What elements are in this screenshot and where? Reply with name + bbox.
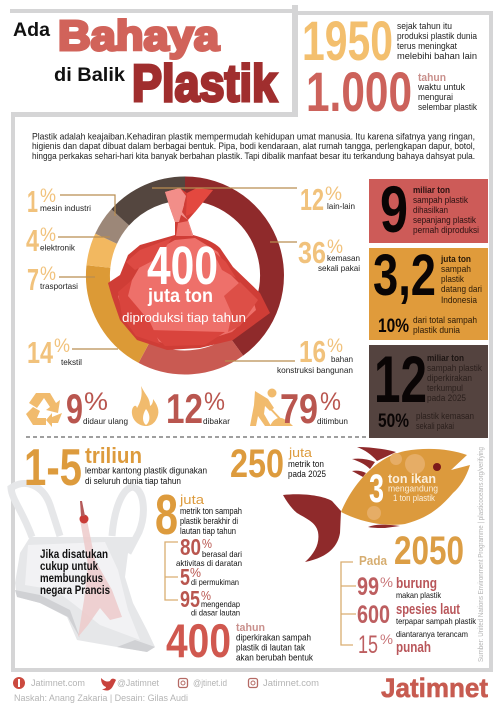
stat: 99% burung: 99 <box>357 573 379 601</box>
stat: 80%: berasal dari <box>202 549 242 559</box>
icon: fish <box>283 447 470 562</box>
footer social links: Jatimnet.com <box>263 678 319 688</box>
panel: 12 miliar ton: sekali pakai <box>416 421 454 432</box>
stat: 600 spesies laut <box>357 601 477 629</box>
stat: 5% <box>180 564 239 590</box>
label: 4% <box>26 223 76 258</box>
panel: 9 miliar ton: dihasilkan <box>413 205 448 216</box>
stat: 9% didaur ulang <box>66 385 128 432</box>
stat: 9% didaur ulang: didaur ulang <box>83 416 128 426</box>
panel: 12 miliar ton: 12 <box>374 342 427 416</box>
stat: 1.000: waktu untuk <box>417 82 465 92</box>
stat: 5%: di permukiman <box>191 577 239 587</box>
title <box>13 12 277 113</box>
label: 16%: 16 <box>299 334 326 369</box>
stat: 15% punah: diantaranya terancam <box>396 629 468 639</box>
stat: 8 juta <box>155 483 242 547</box>
label: 12%: lain-lain <box>327 201 355 211</box>
stat: 400 tahun: plastik di lautan tak <box>236 642 305 652</box>
heading: Pada 2050: Pada <box>359 553 388 568</box>
panel: 12 miliar ton: terkumpul <box>427 383 463 394</box>
leader lines <box>58 188 297 361</box>
logo: Jatimnet <box>381 673 488 703</box>
panel: 9 miliar ton: pernah diproduksi <box>413 225 479 236</box>
panel: 12 miliar ton: diperkirakan <box>427 373 472 384</box>
stat: 95%: 95 <box>180 586 200 612</box>
icon: flame <box>132 386 158 426</box>
stat: 1950: produksi plastik dunia <box>397 31 477 41</box>
panel: 9 miliar ton: sepanjang plastik <box>413 215 476 226</box>
footer social links <box>13 677 319 691</box>
stat: 80% <box>176 534 242 568</box>
stat: 79% ditimbun <box>280 385 348 432</box>
stat: 1950: terus meningkat <box>397 41 457 51</box>
stat: 1-5 triliun: triliun <box>85 443 142 468</box>
donut centre label <box>122 236 246 325</box>
label: 36% <box>298 235 360 273</box>
label: 36%: 36 <box>298 235 326 270</box>
stat: 8 juta: lautan tiap tahun <box>180 526 236 536</box>
stat: 1-5 triliun <box>24 439 207 497</box>
bracket <box>165 542 178 600</box>
stat: 79% ditimbun: % <box>320 388 341 416</box>
stat: 8 juta: 8 <box>155 483 178 547</box>
title: Ada <box>13 20 50 41</box>
panel: 3,2 juta ton: plastik dunia <box>413 325 461 336</box>
stat: 600 spesies laut: spesies laut <box>396 601 460 618</box>
panel: 3,2 juta ton: plastik <box>441 274 464 285</box>
stat: 12% dibakar: dibakar <box>203 416 230 426</box>
label: 14% <box>27 335 82 370</box>
panel: 3,2 juta ton: datang dari <box>441 284 482 295</box>
stat: 15% punah <box>358 629 468 659</box>
stat: 15% punah: 15 <box>358 631 378 659</box>
stat: 400 tahun: diperkirakan sampah <box>236 632 311 642</box>
stat: 600 spesies laut: 600 <box>357 601 390 629</box>
label: 1% <box>27 184 91 219</box>
label: 14%: % <box>54 336 70 357</box>
footer social links: Jatimnet.com <box>31 678 85 688</box>
icon: red plastic bag <box>108 188 270 350</box>
stat: 99% burung: makan plastik <box>396 590 442 600</box>
panel: 9 miliar ton <box>369 172 488 246</box>
stat: 15% punah: % <box>380 631 393 647</box>
stat: 99% burung: burung <box>396 575 437 592</box>
label: 1%: % <box>40 186 56 207</box>
title: Bahaya <box>58 12 220 59</box>
icon: Eiffel tower <box>78 501 122 637</box>
label: 12%: 12 <box>300 182 324 217</box>
intro paragraph <box>32 132 475 162</box>
bag caption: membungkus <box>40 571 103 585</box>
bag caption: cukup untuk <box>40 559 98 573</box>
stat: 99% burung: % <box>380 574 393 590</box>
label: 36%: % <box>327 237 343 258</box>
panel: 3,2 juta ton: 10% <box>378 316 409 337</box>
title: Plastik <box>132 55 277 113</box>
label: 4%: % <box>40 225 56 246</box>
donut centre label: diproduksi tiap tahun <box>122 310 246 325</box>
stat: 95%: % <box>201 588 211 603</box>
stat: 1.000: 1.000 <box>306 60 412 123</box>
label: 1%: mesin industri <box>40 203 91 213</box>
stat: 1.000: mengurai <box>418 92 453 102</box>
stat: 250 juta: metrik ton <box>288 459 324 469</box>
icon: fish: ton ikan <box>388 471 436 486</box>
stat: 1950: melebihi bahan lain <box>397 51 477 61</box>
stat: 400 tahun: 400 <box>166 614 231 667</box>
label: 14%: 14 <box>27 335 54 370</box>
stat: 95%: mengendap <box>201 599 240 609</box>
bag caption: Jika disatukan <box>40 547 108 561</box>
label: 16%: konstruksi bangunan <box>277 365 353 375</box>
stat: 1950: 1950 <box>302 9 393 72</box>
panel: 9 miliar ton: 9 <box>380 172 408 246</box>
stat: 1-5 triliun: 1-5 <box>24 439 82 497</box>
panel: 12 miliar ton: plastik kemasan <box>416 411 474 422</box>
stat: 99% burung <box>357 573 442 601</box>
stat: 250 juta <box>230 442 326 486</box>
label: 7%: trasportasi <box>40 281 78 291</box>
stat: 95%: di dasar lautan <box>191 608 240 618</box>
source note: Sumber: United Nations Environment Programme | plasticoceans.org/verifying <box>476 447 485 662</box>
bag caption: negara Prancis <box>40 583 110 597</box>
donut centre label: juta ton <box>147 286 213 307</box>
stat: 5%: % <box>190 565 201 580</box>
stat: 12% dibakar: % <box>204 388 225 416</box>
label: 4%: 4 <box>26 223 40 258</box>
icon: recycling <box>26 393 62 427</box>
bracket <box>341 562 356 645</box>
stat: 1.000: tahun <box>418 72 446 84</box>
stat: 400 tahun: akan berubah bentuk <box>236 652 313 662</box>
stat: 250 juta: 250 <box>230 442 284 486</box>
panel: 3,2 juta ton: sampah <box>441 264 471 275</box>
stat: 12% dibakar: 12 <box>166 385 203 432</box>
label: 36%: kemasan <box>327 253 360 263</box>
panel: 3,2 juta ton: Indonesia <box>441 295 478 306</box>
label: 36%: sekali pakai <box>318 263 360 273</box>
label: 16%: % <box>327 336 343 357</box>
panel: 12 miliar ton: sampah plastik <box>427 363 482 374</box>
stat: 400 tahun: tahun <box>236 622 265 634</box>
label: 16%: bahan <box>331 354 353 364</box>
panel: 9 miliar ton: sampah plastik <box>413 195 468 206</box>
title: di Balik <box>54 65 125 86</box>
panel: 12 miliar ton: miliar ton <box>427 353 464 364</box>
stat: 1.000: selembar plastik <box>418 102 477 112</box>
stat: 9% didaur ulang: % <box>84 388 108 416</box>
donut centre label: 400 <box>147 236 218 296</box>
label: 4%: elektronik <box>40 242 76 252</box>
footer social links: @Jatimnet <box>117 678 159 688</box>
panel: 3,2 juta ton <box>369 243 488 340</box>
stat: 1-5 triliun: lembar kantong plastik digunakan <box>85 466 207 476</box>
stat: 80%: % <box>202 536 212 551</box>
stat: 8 juta: plastik berakhir di <box>180 516 238 526</box>
stat: 250 juta: juta <box>288 445 313 460</box>
stat: 79% ditimbun: 79 <box>280 385 318 432</box>
stat: 95% <box>180 586 240 618</box>
panel: 12 miliar ton <box>369 342 488 438</box>
panel: 3,2 juta ton: 3,2 <box>373 243 436 308</box>
label: 12%: % <box>325 184 342 205</box>
icon: worker with shovel <box>250 388 293 426</box>
icon: plastic bag with handles <box>11 483 155 652</box>
label: 16% <box>277 334 353 375</box>
panel: 12 miliar ton: 50% <box>378 411 409 432</box>
panel: 3,2 juta ton: juta ton <box>440 254 471 265</box>
stat: 8 juta: juta <box>179 492 205 507</box>
footer credits: Naskah: Anang Zakaria | Desain: Gilas Audi <box>14 693 188 703</box>
stat: 1950: sejak tahun itu <box>397 21 452 31</box>
label: 14%: tekstil <box>61 357 82 367</box>
stat: 80%: aktivitas di daratan <box>176 558 242 568</box>
heading: Pada 2050: 2050 <box>394 529 464 573</box>
stat: 8 juta: metrik ton sampah <box>180 506 242 516</box>
donut chart <box>98 188 272 362</box>
label: 7%: % <box>40 264 56 285</box>
stat: 79% ditimbun: ditimbun <box>317 416 348 426</box>
stat: 1-5 triliun: di seluruh dunia tiap tahun <box>85 476 181 486</box>
icon: fish: mengandung <box>388 484 438 494</box>
panel: 3,2 juta ton: dari total sampah <box>413 315 477 326</box>
panel: 12 miliar ton: pada 2025 <box>427 393 466 404</box>
stat: 400 tahun <box>166 614 313 667</box>
heading: Pada 2050 <box>359 529 464 573</box>
label: 12% <box>300 182 355 217</box>
stat: 5%: 5 <box>180 564 190 590</box>
stat: 9% didaur ulang: 9 <box>66 385 83 432</box>
label: 7%: 7 <box>27 262 39 297</box>
label: 7% <box>27 262 78 297</box>
stat: 80%: 80 <box>180 534 201 560</box>
stat: 250 juta: pada 2025 <box>288 469 326 479</box>
bag caption <box>40 547 110 597</box>
label: 1%: 1 <box>27 184 38 219</box>
stat: 15% punah: punah <box>396 639 431 656</box>
stat: 600 spesies laut: terpapar sampah plastik <box>396 616 477 626</box>
footer social links: @jtinet.id <box>193 678 227 688</box>
panel: 9 miliar ton: miliar ton <box>413 185 450 196</box>
icon: fish: 3 <box>369 467 384 511</box>
icon: fish: 1 ton plastik <box>393 493 435 503</box>
